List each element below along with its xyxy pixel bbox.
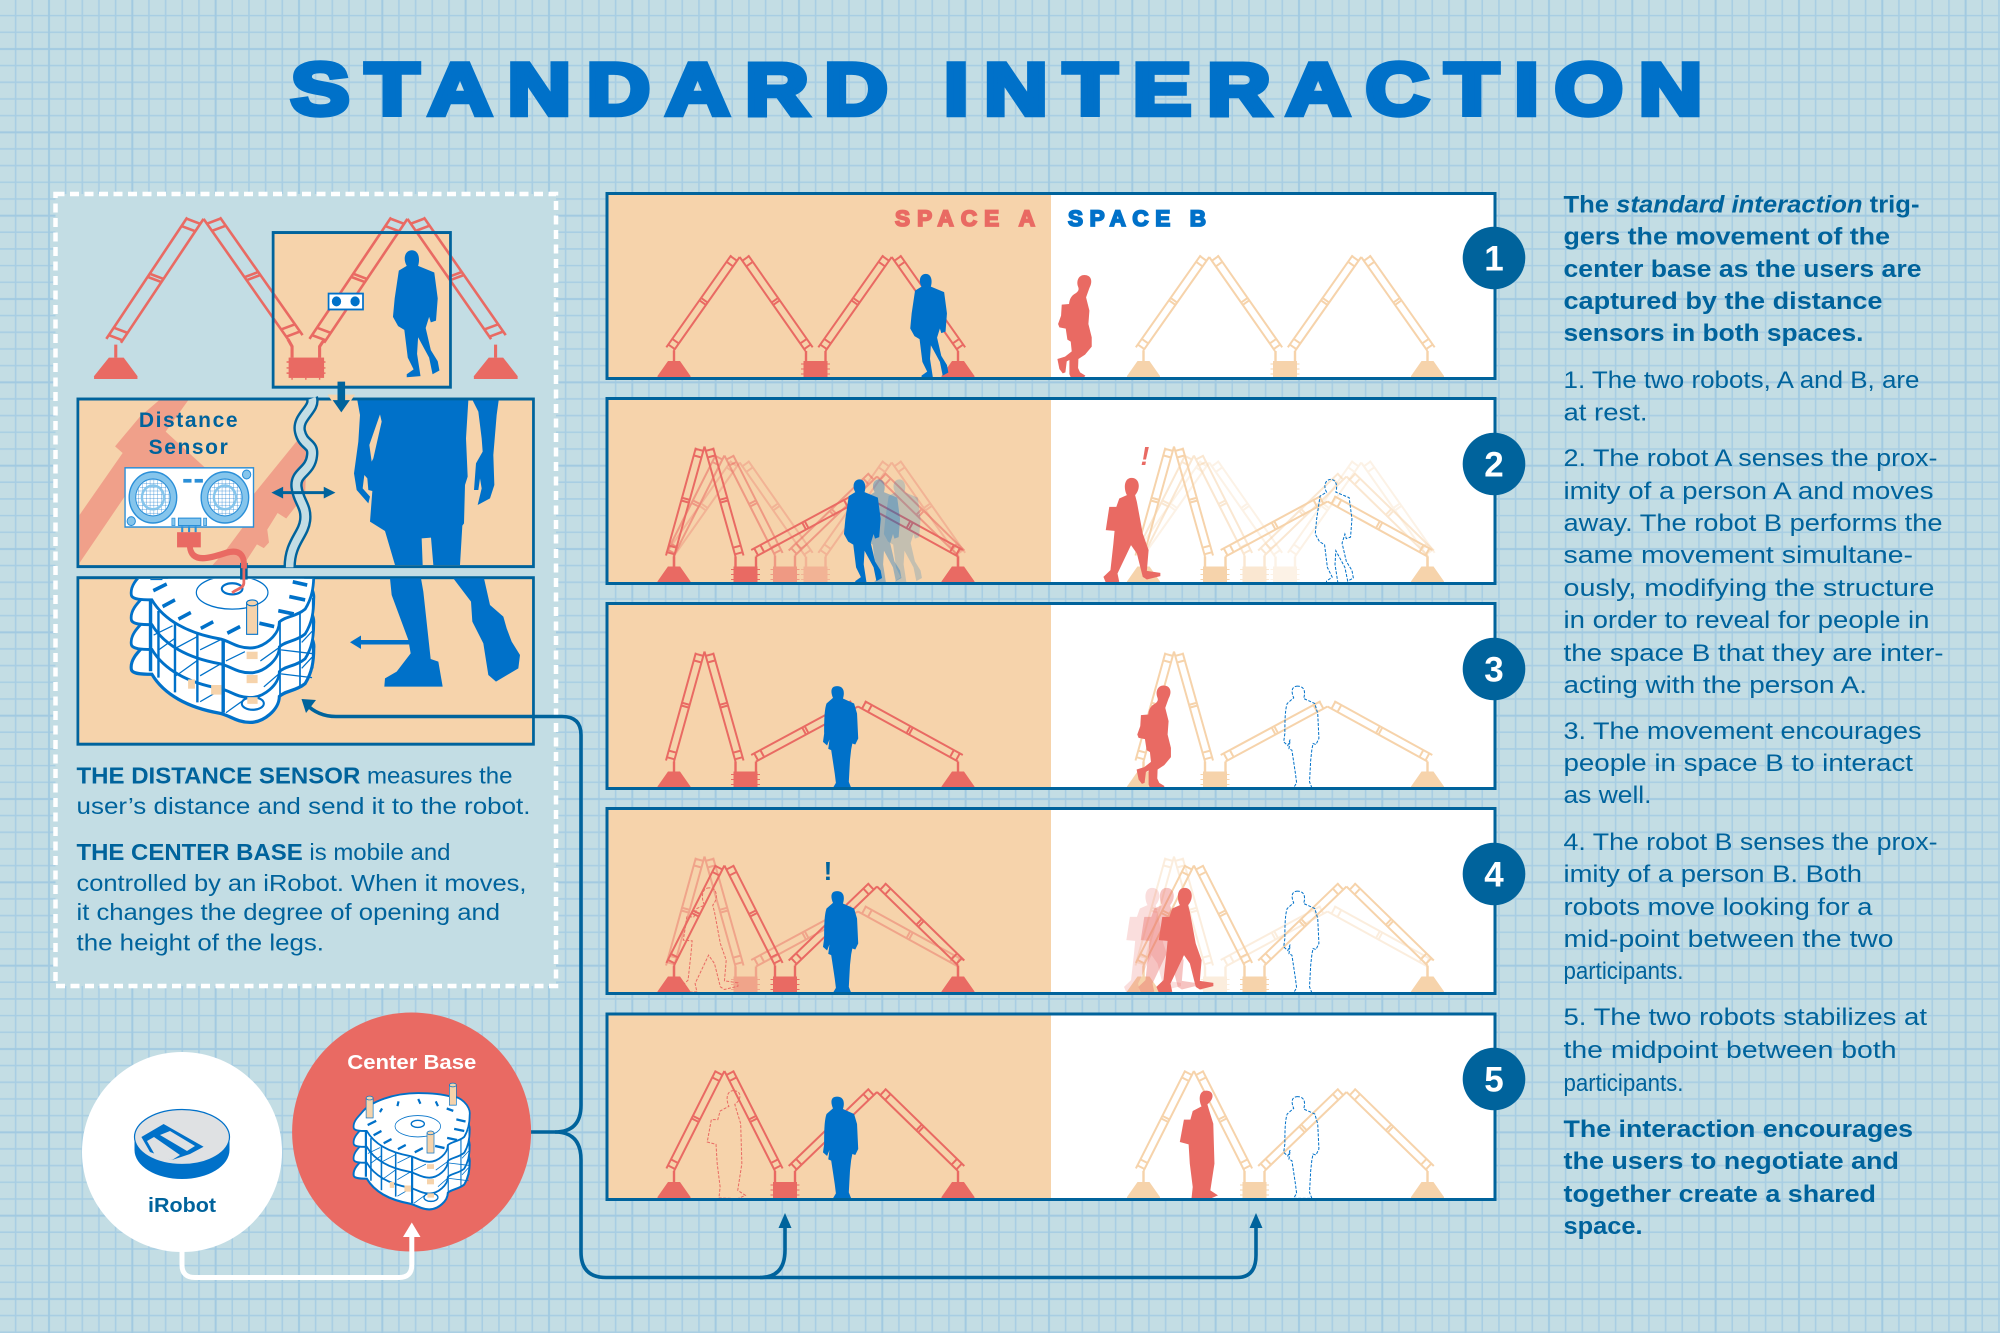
intro paragraph: center base as the users are — [1564, 256, 1922, 283]
step 5 text: 5. The two robots stabilizes at — [1564, 1004, 1927, 1031]
step 5 text: participants. — [1564, 1070, 1684, 1097]
text: left description: user’s distance and send it to the robot. — [76, 793, 530, 819]
step 3 text — [1564, 718, 1922, 809]
robots and people — [658, 649, 1444, 788]
label: distance sensor: Distance — [139, 409, 239, 432]
robots and people — [658, 252, 1444, 379]
text: left description — [76, 762, 530, 956]
step number 2 — [1463, 433, 1525, 495]
step 5 text: the midpoint between both — [1564, 1037, 1896, 1064]
iRobot circle — [82, 1052, 282, 1252]
border — [607, 604, 1495, 788]
intro paragraph: captured by the distance — [1564, 288, 1882, 315]
title: STANDARD INTERACTION — [291, 49, 1718, 131]
border — [607, 1014, 1495, 1200]
text: left description: THE DISTANCE SENSOR measures the — [76, 762, 512, 788]
step 4 text: imity of a person B. Both — [1564, 861, 1862, 888]
sensor cable — [177, 532, 248, 593]
panel 2: robot A senses person A — [607, 398, 1525, 584]
center base — [130, 578, 316, 724]
step 2 text: away. The robot B performs the — [1564, 510, 1942, 537]
intro paragraph — [1564, 192, 1922, 347]
closing paragraph: together create a shared — [1564, 1181, 1876, 1208]
border — [607, 808, 1495, 994]
center base circle — [292, 1012, 531, 1252]
label: distance sensor: Sensor — [149, 436, 229, 459]
step number 4: 4 — [1484, 856, 1504, 894]
step number 2: 2 — [1484, 446, 1504, 484]
exclamation mark: ! — [824, 856, 832, 886]
label: space B: SPACE B — [1068, 206, 1206, 231]
arrow: person pushes base — [350, 636, 409, 649]
intro paragraph: sensors in both spaces. — [1564, 320, 1864, 347]
step 2 text: imity of a person A and moves — [1564, 478, 1934, 505]
zoomed illustration group — [78, 214, 533, 744]
closing paragraph — [1564, 1116, 1913, 1240]
step number 4 — [1463, 843, 1525, 905]
break wave — [290, 398, 312, 567]
step number 5: 5 — [1484, 1060, 1504, 1100]
icon: center base — [354, 1083, 470, 1209]
icon: iRobot — [134, 1110, 230, 1179]
step number 5 — [1463, 1048, 1525, 1110]
label: iRobot: iRobot — [148, 1195, 216, 1217]
text: left description: controlled by an iRobot. When it moves, — [76, 870, 526, 896]
bottom frame — [78, 578, 533, 744]
text: left description: THE CENTER BASE is mobile and — [76, 839, 450, 865]
step 2 text: in order to reveal for people in — [1564, 607, 1930, 634]
arrow: to center base — [302, 699, 316, 713]
step 5 text — [1564, 1004, 1927, 1097]
panel 4: robot B senses person B — [607, 808, 1525, 994]
step 4 text — [1564, 829, 1938, 985]
step 1 text: 1. The two robots, A and B, are — [1564, 367, 1920, 394]
closing paragraph: space. — [1564, 1213, 1642, 1240]
step 2 text: the space B that they are inter- — [1564, 640, 1944, 667]
panel: robot detail — [56, 194, 556, 986]
arrowhead: to robot B base — [1250, 1213, 1262, 1228]
closing paragraph: The interaction encourages — [1564, 1116, 1913, 1143]
person silhouette — [393, 250, 439, 377]
small frame background — [273, 233, 450, 387]
step 2 text: same movement simultane- — [1564, 542, 1913, 569]
panel 1: rest — [607, 194, 1525, 379]
robot diagram — [94, 214, 518, 380]
arrow: sensing range — [271, 487, 335, 499]
sensor module — [125, 468, 253, 532]
panel 3: movement encourages people — [607, 604, 1525, 788]
step number 1 — [1463, 227, 1525, 289]
label: space A: SPACE A — [895, 206, 1035, 231]
small frame border — [273, 233, 450, 387]
sensor badge — [329, 294, 363, 309]
left leg — [384, 578, 443, 687]
step 2 text: ously, modifying the structure — [1564, 575, 1934, 602]
arrow: down from small frame — [328, 382, 355, 415]
step 2 text — [1564, 445, 1944, 699]
label: distance sensor — [139, 409, 239, 459]
step 3 text: people in space B to interact — [1564, 750, 1913, 777]
dashed panel frame — [56, 194, 556, 986]
intro paragraph: gers the movement of the — [1564, 224, 1890, 250]
connector lines: center base to robots — [306, 704, 1256, 1278]
border — [607, 398, 1495, 584]
step 1 text — [1564, 367, 1920, 426]
step number 1: 1 — [1484, 240, 1504, 278]
middle frame — [78, 399, 533, 567]
exclamation mark: ! — [1141, 441, 1150, 471]
step 2 text: acting with the person A. — [1564, 672, 1867, 699]
robots and people — [658, 1067, 1444, 1199]
panel 5: robots stabilize — [607, 1014, 1525, 1200]
step 4 text: 4. The robot B senses the prox- — [1564, 829, 1938, 856]
step 2 text: 2. The robot A senses the prox- — [1564, 445, 1938, 472]
step 4 text: robots move looking for a — [1564, 894, 1873, 921]
label: center base: Center Base — [347, 1052, 476, 1074]
border — [607, 194, 1495, 378]
step number 3 — [1463, 638, 1525, 700]
intro paragraph: The standard interaction trig- — [1564, 192, 1920, 218]
arrowhead: to robot A base — [778, 1213, 792, 1228]
closing paragraph: the users to negotiate and — [1564, 1148, 1899, 1175]
step 1 text: at rest. — [1564, 400, 1648, 426]
step 3 text: 3. The movement encourages — [1564, 718, 1922, 745]
large person silhouette — [354, 400, 520, 687]
robots and people — [658, 444, 1444, 584]
arrow: iRobot to center base — [182, 1222, 420, 1278]
right leg — [453, 578, 520, 682]
robots and people — [658, 854, 1444, 994]
step 3 text: as well. — [1564, 782, 1652, 809]
step 4 text: participants. — [1564, 958, 1684, 985]
text: left description: it changes the degree of opening and — [76, 899, 500, 925]
step 4 text: mid-point between the two — [1564, 926, 1894, 953]
upper body and left arm — [354, 400, 468, 565]
text: left description: the height of the legs. — [76, 930, 324, 956]
text: right description — [1564, 192, 1944, 1240]
step number 3: 3 — [1484, 650, 1504, 690]
right arm — [473, 400, 499, 505]
